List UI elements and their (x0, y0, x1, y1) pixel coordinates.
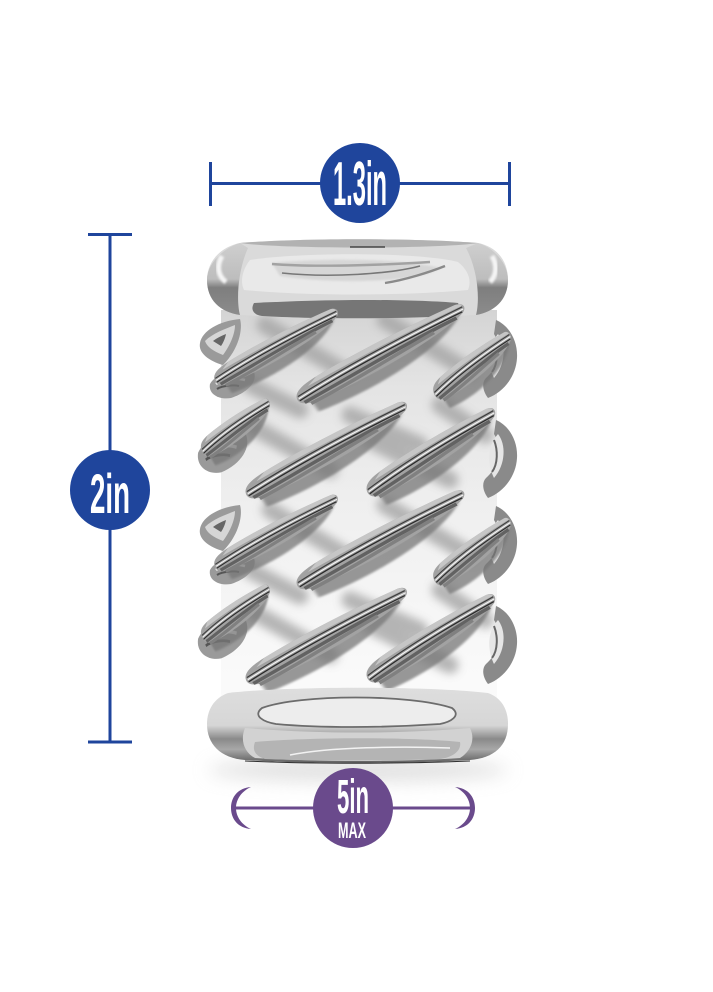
spiral ridges upper rows (193, 302, 528, 513)
arrow line (210, 162, 510, 206)
dimension: circumference 5in max: 5in (337, 771, 369, 824)
left bracket (231, 787, 251, 829)
right edge caps (483, 320, 517, 398)
badge (313, 768, 393, 848)
bottom ring (207, 688, 508, 763)
arrow line (88, 234, 132, 742)
ridge row one (206, 307, 351, 398)
badge (70, 450, 150, 530)
ridge row two (193, 397, 284, 468)
dimension: height 2in (70, 234, 150, 742)
sublabel: MAX (338, 818, 366, 843)
top ring (207, 239, 508, 318)
dimension: width 1.3in (210, 143, 510, 223)
product: glass sleeve (193, 239, 528, 782)
sleeve body (221, 310, 497, 702)
dimension: height 2in: 2in (90, 462, 130, 525)
left edge caps (200, 319, 241, 365)
spiral ridges lower rows (193, 488, 528, 699)
arrow line (236, 806, 472, 810)
floor shadow (208, 758, 508, 782)
badge (320, 143, 400, 223)
dimension: circumference 5in max (231, 768, 475, 848)
right bracket (455, 787, 475, 829)
dimension: width 1.3in: 1.3in (333, 150, 387, 219)
